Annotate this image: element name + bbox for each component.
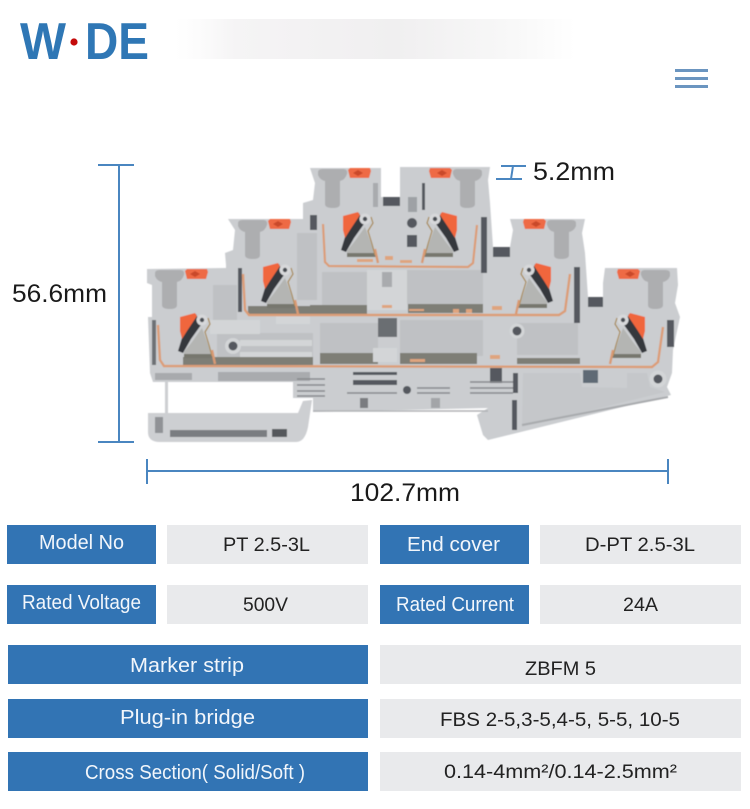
spec label: End cover: [380, 525, 529, 564]
foot slots: [155, 417, 287, 437]
dimension: pitch 5.2mm: 5.2mm: [533, 158, 615, 186]
olive channels: [183, 304, 580, 365]
copper rail: upper: [323, 224, 477, 267]
spec value: FBS: FBS 2-5,3-5,4-5, 5-5, 10-5: [440, 710, 680, 731]
spec label: Rated Voltage: [7, 585, 156, 624]
spec value: FBS: [380, 699, 741, 738]
spec label: Model No: Model No: [39, 532, 124, 554]
copper rail: lower: [158, 325, 663, 367]
spec label: End cover: End cover: [407, 534, 500, 556]
spring clamp: middle right: [516, 219, 576, 314]
spec value: 500V: 500V: [243, 595, 288, 616]
logo: W·DE: DE: [85, 13, 149, 71]
copper rail: middle: [243, 274, 570, 315]
dimension: pitch 5.2mm: [496, 158, 615, 186]
spring clamp: upper right: [422, 168, 482, 263]
logo: W·DE: [20, 13, 149, 71]
spring clamp: upper left: [318, 168, 378, 263]
dark slots and holes: [152, 183, 674, 430]
spec label: Marker strip: [8, 645, 368, 684]
recessed panels: [155, 233, 665, 427]
spec label: Cross Section: [8, 752, 368, 791]
spec value: PT 2.5-3L: [167, 525, 368, 564]
spec value: 24A: 24A: [623, 595, 658, 616]
spec label: Plug-in bridge: Plug-in bridge: [120, 707, 255, 729]
spring clamp: lower left: [155, 269, 215, 364]
spec label: Cross Section: Cross Section( Solid/Soft ): [85, 762, 305, 784]
faded header band: [175, 19, 575, 59]
spec label: Marker strip: Marker strip: [130, 655, 244, 677]
spec value: D-PT 2.5-3L: [540, 525, 741, 564]
icon: menu: [675, 69, 708, 88]
spec label: Plug-in bridge: [8, 699, 368, 738]
spec value: ZBFM 5: ZBFM 5: [525, 659, 596, 680]
spring clamp: middle left: [238, 219, 298, 314]
dimension: height 56.6mm: 56.6mm: [12, 280, 107, 308]
dimension: width 102.7mm: [147, 459, 668, 507]
spec value: wire range: 0.14-4mm²/0.14-2.5mm²: [444, 762, 677, 783]
spec label: Rated Voltage: Rated Voltage: [22, 592, 141, 614]
spec label: Rated Current: [380, 585, 529, 624]
spec label: Model No: [7, 525, 156, 564]
terminal body: [147, 167, 680, 440]
fin lines: [297, 379, 668, 425]
spec value: D-PT 2.5-3L: D-PT 2.5-3L: [585, 535, 695, 556]
spec value: PT 2.5-3L: PT 2.5-3L: [223, 535, 310, 556]
light centre pieces: [210, 270, 666, 388]
mounting foot: [148, 382, 312, 442]
logo: W·DE: W: [20, 13, 67, 71]
small copper contacts: [357, 256, 502, 362]
spec value: 24A: [540, 585, 741, 624]
spec value: 500V: [167, 585, 368, 624]
spec value: ZBFM 5: [380, 645, 741, 684]
dimension: height 56.6mm: [12, 165, 134, 442]
spec value: wire range: [380, 752, 741, 791]
spring clamp: lower right: [610, 269, 670, 364]
terminal block product illustration: [147, 167, 680, 442]
spec label: Rated Current: Rated Current: [396, 594, 514, 616]
dimension: width 102.7mm: 102.7mm: [350, 479, 460, 507]
